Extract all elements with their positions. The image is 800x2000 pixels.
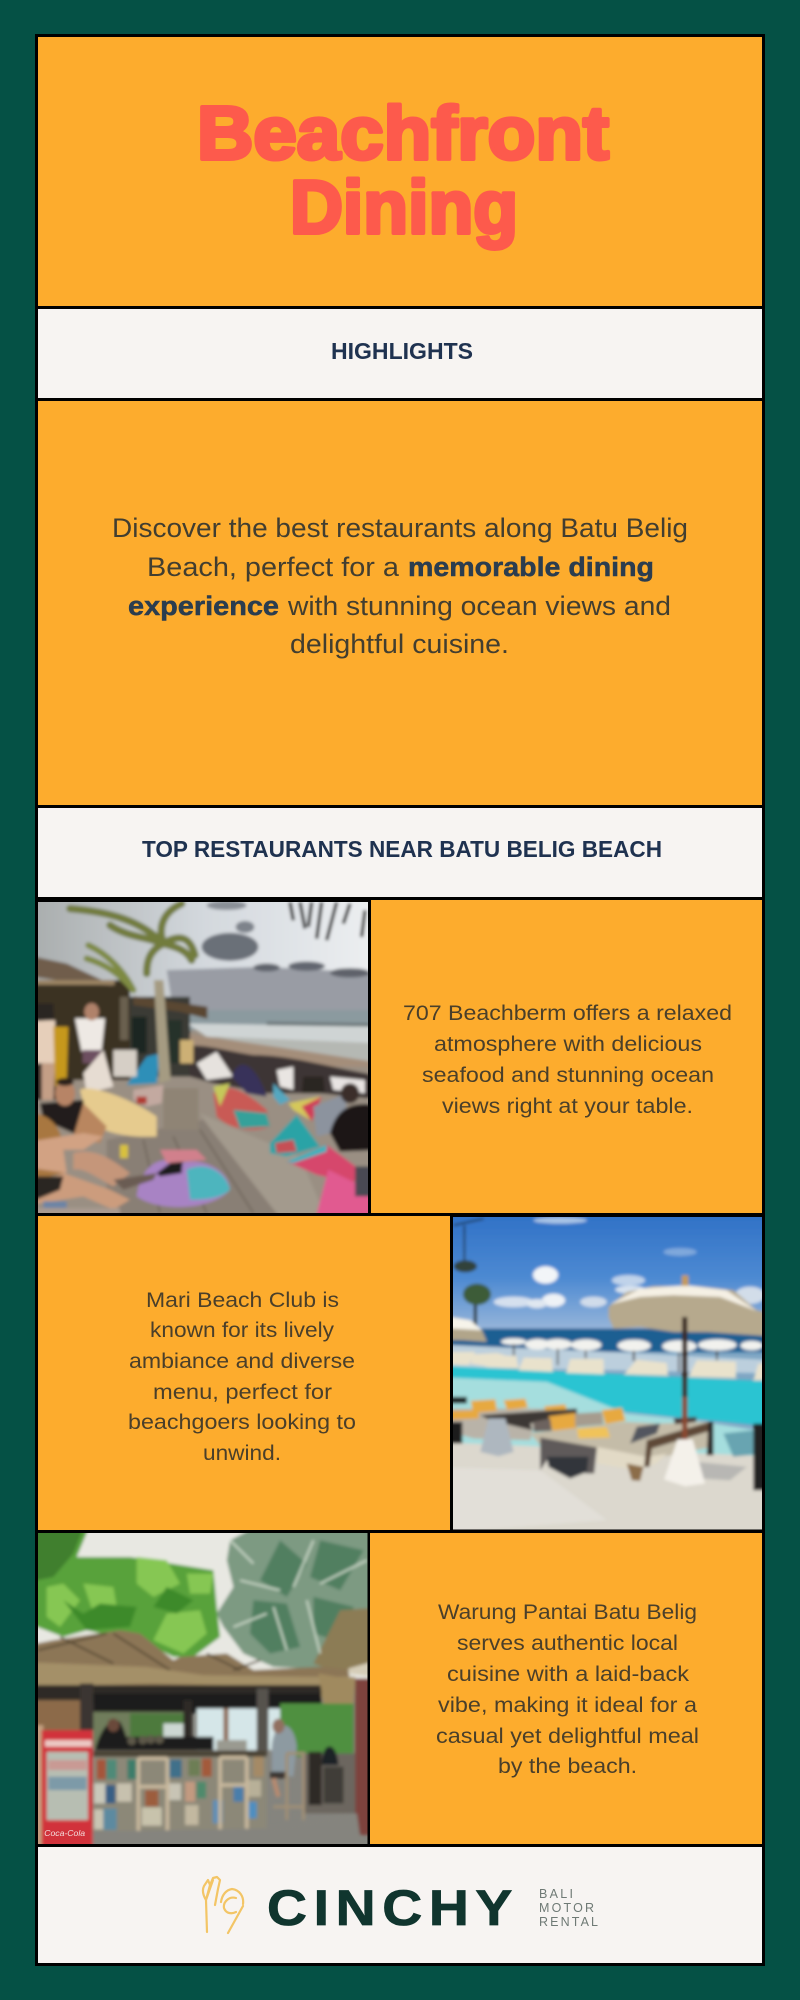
title: Beachfront bbox=[197, 91, 609, 175]
panel: Warung Pantai text bbox=[370, 1533, 762, 1844]
panel: Mari Beach Club text: beachgoers looking to bbox=[128, 1411, 356, 1434]
title: Dining bbox=[290, 165, 518, 249]
panel: footer logo: MOTOR bbox=[539, 1901, 594, 1915]
panel: Warung Pantai text: Warung Pantai Batu Belig bbox=[438, 1601, 697, 1624]
panel: 707 Beachberm text: 707 Beachberm offers a relaxed bbox=[403, 1002, 732, 1025]
icon: hand gesture bbox=[203, 1877, 243, 1933]
intro text: with stunning ocean views and bbox=[287, 591, 671, 621]
panel: Mari Beach Club text: known for its lively bbox=[150, 1319, 335, 1342]
photo: Warung Pantai Batu Belig bbox=[20, 1517, 389, 1860]
photo: Mari Beach Club pool bbox=[434, 1200, 780, 1547]
intro text: Discover the best restaurants along Batu Belig bbox=[112, 513, 688, 543]
intro text: Beach, perfect for a bbox=[147, 552, 400, 582]
panel: Mari Beach Club text: Mari Beach Club is bbox=[146, 1289, 339, 1312]
panel: Mari Beach Club text bbox=[38, 1216, 450, 1530]
title bbox=[197, 91, 609, 249]
panel: footer logo bbox=[38, 1847, 762, 1963]
panel: Warung Pantai text: casual yet delightful meal bbox=[436, 1725, 699, 1748]
photo: 707 Beachberm beach lounge bbox=[20, 887, 387, 1228]
photo: Warung Pantai Batu Belig: Coca-Cola bbox=[44, 1828, 85, 1838]
panel: footer logo: RENTAL bbox=[539, 1915, 598, 1929]
panel: 707 Beachberm text: views right at your table. bbox=[442, 1095, 693, 1118]
panel: Warung Pantai text: cuisine with a laid-back bbox=[447, 1663, 690, 1686]
intro text: delightful cuisine. bbox=[290, 629, 509, 659]
panel: restaurants heading: TOP RESTAURANTS NEAR BATU BELIG BEACH bbox=[142, 836, 662, 862]
intro text bbox=[112, 513, 688, 659]
panel: Mari Beach Club text: unwind. bbox=[203, 1442, 281, 1465]
panel: restaurants heading bbox=[38, 808, 762, 897]
panel: Warung Pantai text: vibe, making it ideal for a bbox=[438, 1694, 697, 1717]
panel: highlights heading bbox=[38, 309, 762, 398]
panel: Warung Pantai text: by the beach. bbox=[498, 1755, 637, 1778]
panel: 707 Beachberm text bbox=[371, 900, 762, 1213]
panel: intro bbox=[38, 401, 762, 805]
panel: 707 Beachberm text: seafood and stunning ocean bbox=[422, 1064, 714, 1087]
intro text: experience bbox=[128, 591, 279, 621]
panel: highlights heading: HIGHLIGHTS bbox=[331, 338, 473, 364]
panel: Mari Beach Club text: ambiance and diverse bbox=[129, 1350, 355, 1373]
intro text: memorable dining bbox=[408, 552, 654, 582]
panel: title bbox=[38, 37, 762, 306]
panel: Warung Pantai text: serves authentic local bbox=[457, 1632, 678, 1655]
panel: 707 Beachberm text: atmosphere with delicious bbox=[434, 1033, 702, 1056]
panel: footer logo: CINCHY bbox=[267, 1880, 519, 1936]
panel: footer logo: BALI bbox=[539, 1887, 573, 1901]
panel: Mari Beach Club text: menu, perfect for bbox=[153, 1381, 332, 1404]
